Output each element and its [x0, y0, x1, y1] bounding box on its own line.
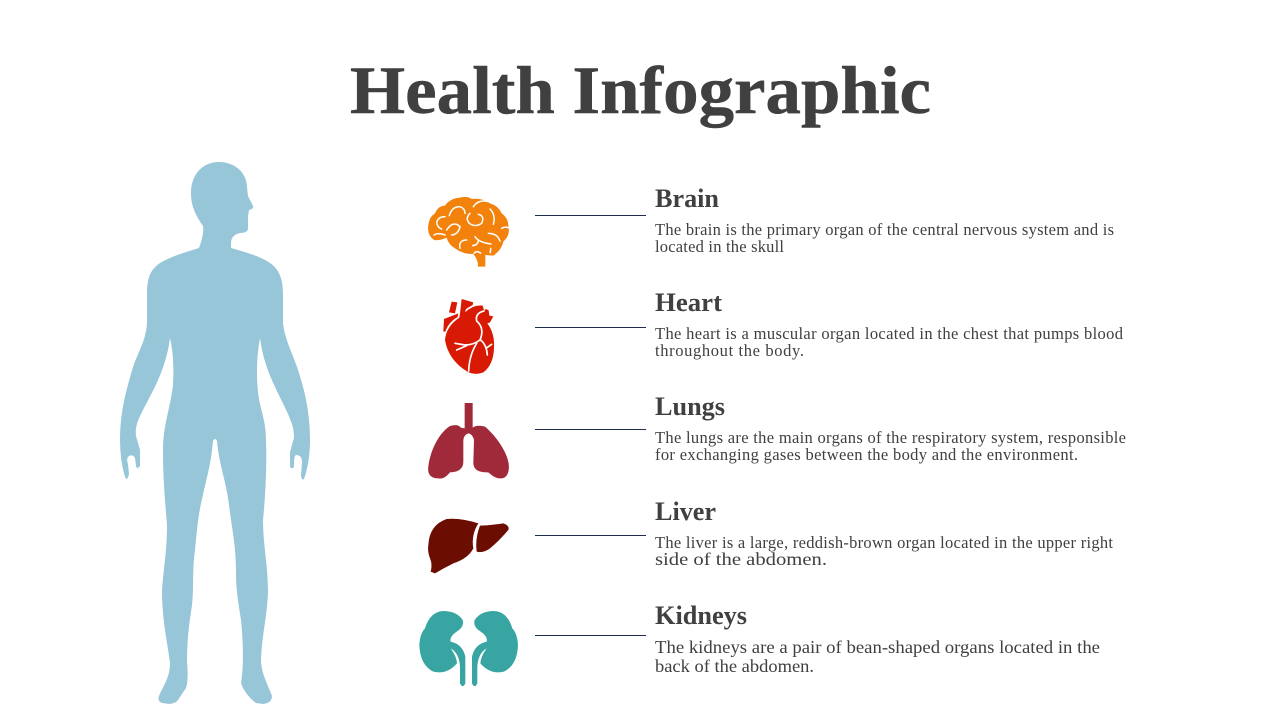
text block: kidneys: Kidneys: [655, 601, 747, 630]
text block: liver: side of the abdomen.: [655, 549, 827, 569]
title: Health Infographic: [350, 52, 931, 128]
text block: kidneys: back of the abdomen.: [655, 656, 814, 676]
text block: lungs: The lungs are the main organs of the respiratory system, responsible: [655, 428, 1126, 447]
text block: heart: The heart is a muscular organ located in the chest that pumps blood: [655, 324, 1124, 343]
text block: kidneys: [655, 601, 1100, 676]
text block: heart: [655, 288, 1124, 360]
text block: heart: throughout the body.: [655, 341, 804, 360]
icon: kidneys: [419, 611, 518, 686]
human body silhouette: [120, 162, 310, 704]
icon: liver: [428, 519, 509, 573]
connector lines: [535, 216, 646, 636]
text block: brain: The brain is the primary organ of the central nervous system and is: [655, 220, 1114, 239]
text block: lungs: Lungs: [655, 392, 725, 421]
text block: lungs: for exchanging gases between the body and the environment.: [655, 445, 1078, 464]
icon: brain: [428, 197, 509, 267]
text block: liver: The liver is a large, reddish-brown organ located in the upper right: [655, 533, 1113, 552]
text block: brain: located in the skull: [655, 237, 784, 256]
text block: liver: [655, 497, 1113, 569]
text block: lungs: [655, 392, 1126, 464]
text block: kidneys: The kidneys are a pair of bean-shaped organs located in the: [655, 637, 1100, 657]
text block: heart: Heart: [655, 288, 722, 317]
icon: heart: [443, 299, 494, 374]
icon: lungs: [428, 403, 509, 479]
text block: brain: [655, 184, 1114, 256]
text block: liver: Liver: [655, 497, 716, 526]
text block: brain: Brain: [655, 184, 720, 213]
